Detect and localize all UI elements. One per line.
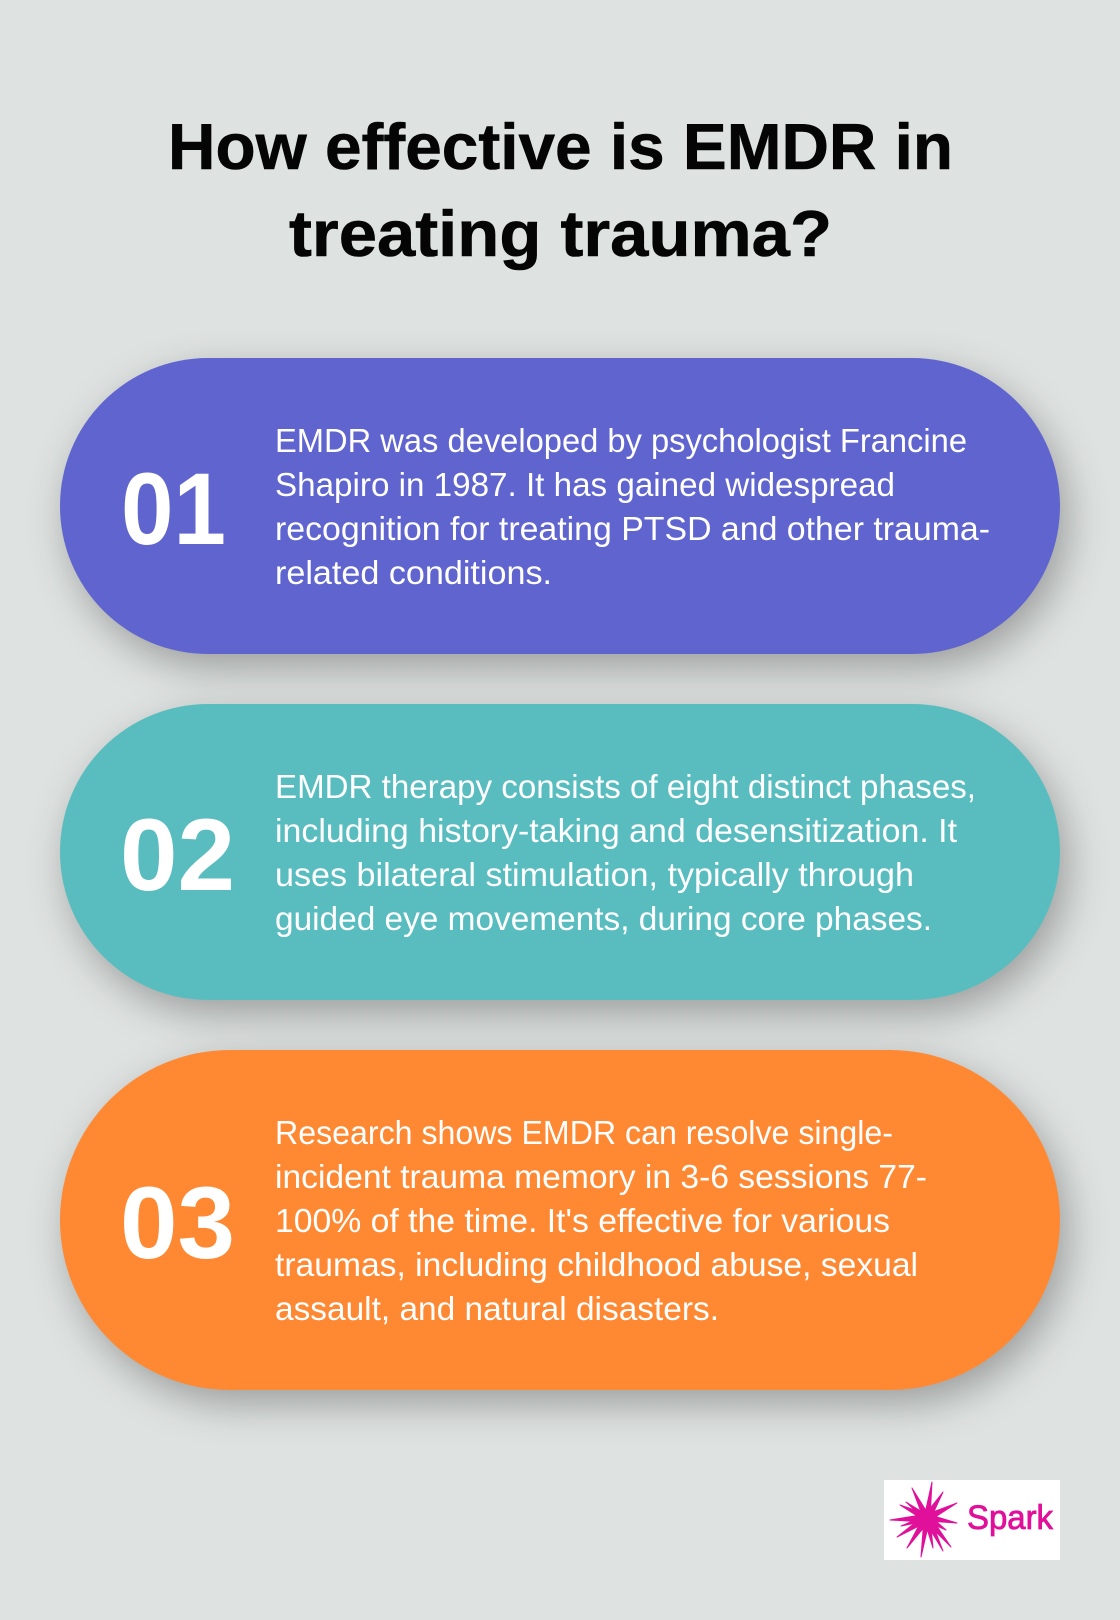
panel: step 03 xyxy=(60,1050,1068,1404)
text block: step 03: 100% of the time. It's effective for various xyxy=(275,1202,890,1239)
number 01: 01 xyxy=(121,452,226,566)
number 03: 03 xyxy=(120,1166,235,1280)
number 02: 02 xyxy=(120,798,235,912)
text block: step 03 xyxy=(275,1114,927,1327)
text block: step 01: EMDR was developed by psychologist Francine xyxy=(275,422,967,459)
text block: step 01: related conditions. xyxy=(275,554,552,591)
text block: step 02: guided eye movements, during core phases. xyxy=(275,900,932,937)
text block: step 02: including history-taking and desensitization. It xyxy=(275,812,957,849)
title: treating trauma? xyxy=(289,197,832,270)
text block: step 03: assault, and natural disasters. xyxy=(275,1290,719,1327)
title xyxy=(168,110,953,270)
text block: step 01: Shapiro in 1987. It has gained widespread xyxy=(275,466,895,503)
logo: Spark xyxy=(884,1480,1060,1560)
icon: spark starburst xyxy=(890,1482,957,1557)
text block: step 01: recognition for treating PTSD and other trauma- xyxy=(275,510,990,547)
logo wordmark: Spark xyxy=(967,1499,1054,1537)
text block: step 02: EMDR therapy consists of eight distinct phases, xyxy=(275,768,976,805)
text block: step 03: traumas, including childhood abuse, sexual xyxy=(275,1246,918,1283)
text block: step 03: Research shows EMDR can resolve single- xyxy=(275,1114,893,1151)
panel: step 02 xyxy=(60,704,1068,1014)
text block: step 02 xyxy=(275,768,976,937)
text block: step 03: incident trauma memory in 3-6 sessions 77- xyxy=(275,1158,927,1195)
panel: step 01 xyxy=(60,358,1068,668)
text block: step 02: uses bilateral stimulation, typically through xyxy=(275,856,914,893)
text block: step 01 xyxy=(275,422,990,591)
title: How effective is EMDR in xyxy=(168,110,953,183)
